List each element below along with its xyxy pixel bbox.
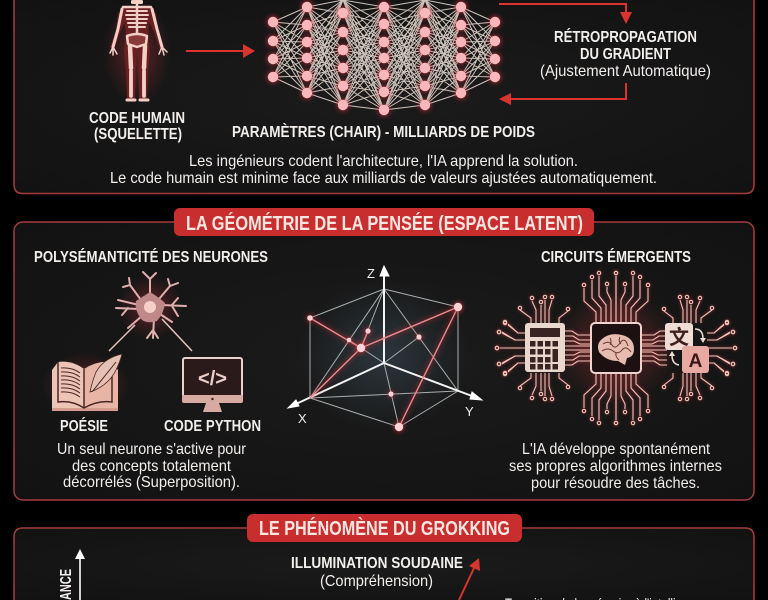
- latent points: [307, 303, 462, 431]
- panel frame: [14, 0, 754, 194]
- icon: translation: A: [689, 351, 703, 372]
- heading badge: grokking: LE PHÉNOMÈNE DU GROKKING: [259, 517, 510, 540]
- panel frame: [14, 528, 754, 600]
- text block: superposition: décorrélés (Superposition).: [63, 474, 240, 491]
- heading badge: géométrie: LA GÉOMÉTRIE DE LA PENSÉE (ESPACE LATENT): [186, 212, 583, 235]
- circuit traces: [495, 271, 737, 425]
- icon: calculator: [525, 323, 565, 372]
- heading badge: géométrie: [174, 208, 594, 236]
- cube edges: [310, 289, 458, 427]
- label: rétropropagation: (Ajustement Automatique): [540, 63, 711, 80]
- label: rétropropagation: [540, 27, 711, 80]
- arrow: squelette vers réseau: [186, 44, 255, 58]
- icon: monitor code: </>: [198, 368, 227, 390]
- icon: monitor code: [182, 358, 243, 412]
- heading badge: grokking: [247, 514, 522, 542]
- arrow: rétropropagation vers réseau: [499, 83, 626, 105]
- text block: superposition: des concepts totalement: [72, 458, 232, 475]
- label: poésie: POÉSIE: [60, 416, 108, 435]
- label: code python: CODE PYTHON: [164, 418, 261, 435]
- icon: translation: 文: [669, 325, 689, 349]
- axis: performance: ANCE: [58, 569, 75, 600]
- axis labels: Z: [367, 266, 375, 281]
- panel: géométrie de la pensée: [14, 208, 754, 500]
- icon: brain chip: [591, 323, 641, 373]
- axes: [296, 275, 472, 404]
- network nodes: [268, 2, 500, 115]
- subheading: polysémanticité: POLYSÉMANTICITÉ DES NEURONES: [34, 247, 268, 266]
- label: paramètres: PARAMÈTRES (CHAIR) - MILLIARDS DE POIDS: [232, 122, 535, 141]
- axis labels: X: [298, 411, 307, 426]
- text block: architecture: Les ingénieurs codent l'architecture, l'IA apprend la solution.: [189, 153, 578, 170]
- label: rétropropagation: RÉTROPROPAGATION: [554, 27, 697, 46]
- panel: code humain et paramètres: [14, 0, 754, 194]
- label: code humain: [89, 110, 185, 143]
- text block: circuits: pour résoudre des tâches.: [531, 475, 700, 492]
- network connections: [273, 0, 495, 110]
- subheading: circuits: CIRCUITS ÉMERGENTS: [541, 247, 691, 266]
- neural network: [268, 0, 500, 115]
- latent vectors: [310, 307, 458, 427]
- text block: architecture: Le code humain est minime face aux milliards de valeurs ajustées automatiquement.: [110, 170, 657, 187]
- text block: circuits: ses propres algorithmes internes: [509, 458, 722, 475]
- text block: superposition: Un seul neurone s'active pour: [57, 441, 247, 458]
- axis labels: Y: [465, 404, 474, 419]
- text block: superposition: [57, 441, 247, 491]
- chart: 3D latent space: [288, 266, 482, 431]
- label: code humain: (SQUELETTE): [94, 126, 182, 143]
- icon: skeleton: [103, 0, 171, 104]
- axis labels: [298, 266, 474, 426]
- icon: book and quill: [41, 353, 129, 417]
- icon: translation: [665, 323, 709, 373]
- text block: circuits: L'IA développe spontanément: [522, 441, 710, 458]
- text block: circuits: [509, 441, 722, 492]
- panel frame: [14, 222, 754, 500]
- icon: emergent circuits: [495, 271, 737, 425]
- panel: grokking: [14, 514, 754, 600]
- arrow: performance curve: [459, 558, 480, 600]
- axis: performance: [58, 549, 85, 600]
- label: rétropropagation: DU GRADIENT: [580, 46, 671, 63]
- label: illumination soudaine: (Compréhension): [320, 573, 433, 590]
- icon: neuron: [109, 272, 192, 351]
- text block: architecture: [110, 153, 657, 187]
- label: illumination soudaine: ILLUMINATION SOUDAINE: [291, 555, 463, 572]
- arrow: réseau vers rétropropagation: [499, 4, 632, 24]
- label: code humain: CODE HUMAIN: [89, 110, 185, 127]
- label: illumination soudaine: [291, 555, 463, 590]
